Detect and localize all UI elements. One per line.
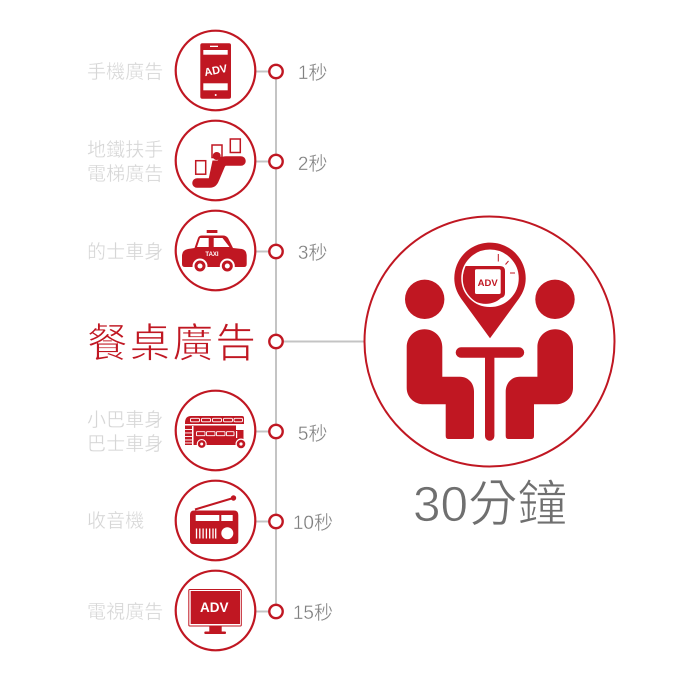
node: table ad [269,335,283,348]
time: 15秒: 15秒 [293,602,333,624]
node: 5 seconds [269,425,283,438]
row: escalator ad [87,121,328,200]
time: 2秒: 2秒 [298,153,328,175]
label: 的士車身: 的士車身 [87,241,163,263]
time: 1秒: 1秒 [298,62,328,84]
icon: right person [506,280,575,439]
node: 10 seconds [269,515,283,528]
large circle [364,216,614,466]
node: 1 second [269,65,283,78]
icon: television ADV: ADV [200,600,229,615]
icon: taxi [176,211,255,290]
icon: mobile phone ADV: ADV [203,63,229,79]
icon: left person [405,280,474,439]
label: 地鐵扶手電梯廣告: 電梯廣告 [87,163,163,185]
row: TV ad [87,571,333,650]
label: 地鐵扶手電梯廣告: 地鐵扶手 [87,140,163,161]
icon: taxi: TAXI [205,252,219,258]
icon: double-decker bus [176,391,255,470]
row: table ad highlight [87,320,283,366]
label: 手機廣告: 手機廣告 [87,61,163,83]
node: 15 seconds [269,605,283,618]
icon: mobile phone ADV [176,31,255,110]
heading: 30分鐘: 30分鐘 [413,477,567,532]
icon: location pin with ADV: ADV [478,278,498,289]
icon: television ADV [176,571,255,650]
row: bus ad [87,391,328,470]
node: 2 seconds [269,155,283,168]
time: 10秒: 10秒 [293,512,333,534]
row: mobile phone ad [87,31,328,110]
time: 5秒: 5秒 [298,423,328,445]
icon: escalator [176,121,255,200]
label: 小巴車身巴士車身: 巴士車身 [87,433,163,455]
heading: 餐桌廣告: 餐桌廣告 [87,320,258,366]
label: 收音機: 收音機 [87,510,144,532]
icon: radio [176,481,255,560]
icon: location pin with ADV [454,243,526,338]
panel: table ad illustration [364,216,614,466]
icon: table [456,347,524,441]
label: 電視廣告: 電視廣告 [87,601,163,623]
node: 3 seconds [269,245,283,258]
label: 小巴車身巴士車身: 小巴車身 [87,410,163,431]
row: radio ad [87,481,333,560]
time: 3秒: 3秒 [298,242,328,264]
row: taxi ad [87,211,328,290]
